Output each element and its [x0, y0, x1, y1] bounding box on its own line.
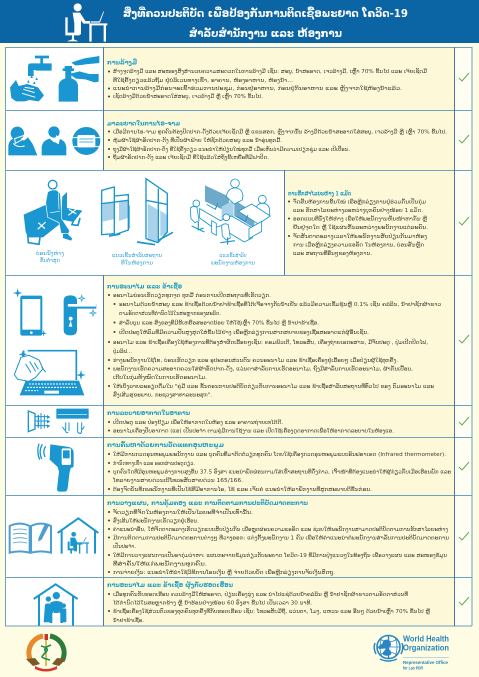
text: physical distancing: ແລະ ຮັກສາໄລຍະຫ່າງລະຫວ່າງບຸກຄົນຢ່າງໜ້ອຍ 1 ແມັດ.	[293, 206, 423, 214]
caption: seating: ຂັ້ນຕ່ຳສຸດ	[40, 257, 61, 264]
text: hand washing: ການລ້າງມື	[107, 58, 138, 66]
text: cleaning and disinfection: ປຸ່ມລິຟ...	[113, 348, 132, 355]
text: ventilation: ການລະບາຍອາກາດໃນອາຄານ	[107, 409, 190, 417]
text: cleaning at home: ນ້ຳຢາຂ້າເຊື້ອ.	[113, 617, 144, 624]
caption: partition	[112, 252, 163, 266]
text: temperature screening	[107, 440, 452, 493]
text: cleaning at home: ການອະນາໄມ ແລະ ຂ້າເຊື້ອ ຜູ້ງກັບຮອດເຮືອນ	[107, 580, 233, 590]
text: cleaning at home: ໄດ້ກຳນົດໄວ້ໃນສະຫຼາກຂ້າງ ຫຼື ນ້ຳຮ້ອນຢ່າງໜ້ອຍ 60 ອົງສາ ຂຶ້ນໄປ ເປັນເວລາ 30 ນາທີ.	[113, 598, 312, 606]
text: ventilation: ເປີດປະຕູ ແລະ ປ່ອງຢ້ຽມ ເພື່ອໃຫ້ອາກາດໃນຫ້ອງ ແລະ ອາຄານຖ່າຍເທໄດ້ດີ.	[113, 418, 283, 426]
tick	[459, 217, 469, 225]
icon: soap dispenser and hands	[59, 56, 99, 102]
caption: seating	[36, 250, 65, 264]
text: cleaning and disinfection: ການອະນາໄມ ແລະ ຂ້າເຊື້ອ	[107, 282, 182, 290]
text: cleaning and disinfection: ພະນັກງານເຮັດຄວາມສະອາດຄວນໃສ່ຜ້າອັດປາກ-ດັງ, ແວ່ນຕາສຳລັບການເຮັດອະນາໄມ, ຖົງມືສຳລັບການເຮັດອະນາໄມ, ຜ້າກັນເປື້ອນ,	[113, 364, 413, 372]
text: temperature screening: ໂທລາຍງານສາຍດ່ວນເບີໂທລະສັບສາຍດ່ວນ 165/166.	[112, 477, 243, 484]
tick	[459, 532, 469, 540]
text: cleaning at home	[107, 580, 431, 624]
text: hand washing: ທີ່ໃຊ້ຄັ້ງດຽວແລ້ວຖິ້ມ ຢູ່ບໍລິເວນທາງເຂົ້າ, ອາຄານ, ຫ້ອງອາຫານ, ຫ້ອງນ້ຳ...	[112, 77, 293, 84]
header banner	[0, 0, 479, 43]
icon: ventilation and air conditioner	[28, 409, 89, 434]
panel: planning and management	[10, 498, 469, 577]
text: respiratory hygiene: ຖິ້ມຜ້າອັດປາກ-ດັງ ແລະ ເຈ້ຍເຊັດມື ທີ່ໃຊ້ແລ້ວໃສ່ຖັງຂີ້ເຫຍື້ອທີ່ມີຝາປິດ.	[112, 153, 269, 161]
text: ventilation	[107, 409, 394, 434]
text: cleaning and disinfection: ໃຫ້ເບິ່ງລາຍລະອຽດຕື່ມໃນ "ຄູ່ມື ແລະ ຂັ້ນຕອນການປະຕິບັດກ່ຽວກັບການອະນາໄມ ແລະ ຂ້າເຊື້ອສຳລັບສະຖານທີ່ທົ່ວໄປ ຂອງ ກົມອະນາໄມ ແລະ	[113, 382, 435, 390]
icon: standalone partitions	[102, 179, 173, 245]
icon: book and pencil	[10, 524, 51, 553]
tick	[459, 335, 469, 343]
text: temperature screening: ໃຫ້ມີການກວດອຸນຫະພູມພະນັກງານ ແລະ ບຸກຄົນທີ່ມາຕິດຕໍ່ວຽກທຸກຄົນ ໂດຍໃຊ້ເຄື່ອງກວດອຸນຫະພູມແບບອິນຟຣາເຣດ (Infrared thermometer).	[113, 451, 446, 458]
icon: phone, door handle and laptop	[13, 288, 96, 395]
tick	[459, 135, 469, 143]
icon: family in house	[34, 584, 78, 626]
panel: hand washing	[10, 56, 469, 102]
text: cleaning and disinfection: ສຳລັບບູນ ແລະ ສິ່ງຂອງທີ່ມີຂີ້ເຫຍື້ອສະອາດນ້ອຍ ໃຫ້ໃຊ້ເຫຼົ້າ 70% ຂຶ້ນໄປ ຫຼື ນ້ຳຢາຂ້າເຊື້ອ.	[119, 318, 319, 326]
text: temperature screening: ການຄົ້ນຫາດ້ວຍການວັດແທກອຸນຫະພູມ	[107, 440, 224, 450]
text: physical distancing: ການຮັກສາໄລຍະຫ່າງ 1 ແມັດ	[288, 188, 351, 198]
tick	[459, 417, 469, 425]
text: hand washing	[107, 58, 427, 100]
text: planning and management: ຈັດວຽກທີ່ຈັດໃນຫ້ອງການໃຫ້ເປັນໄລຍະທີ່ຈຳເປັນເທົ່ານັ້ນ.	[112, 508, 253, 516]
text: respiratory hygiene: ເມື່ອມີການໄອ-ຈາມ ທຸກຄົນຕ້ອງປິດປາກ-ດັງດ້ວຍເຈ້ຍເຊັດມື ຫຼື ແຂນສອກ, ຫຼັງຈາກນັ້ນ ລ້າງມືດ້ວຍນ້ຳສະອາດໃສ່ສະບູ, ເຈວລ້າງມື ຫຼື ເຫຼົ້າ 70% ຂຶ້ນໄປ.	[113, 128, 447, 136]
logo: Ministry of Health	[26, 634, 66, 672]
tick	[459, 73, 469, 81]
text: cleaning and disinfection: ອະນາໄມບ່ອນເຮັດວຽກທຸກຈຸດ ທຸກມື້ ກ່ອນການເປີດສະຖານທີ່ເຮັດວຽກ.	[113, 291, 271, 299]
text: cleaning and disinfection: ອະນາໄມ ແລະ ຂ້າເຊື້ອເຄື່ອງໃຊ້ຫ້ອງການທີ່ຕ້ອງສຳຜັດເລື້ອຍໆເຊັ່ນ: ຄອມພິວເຕີ, ໂທລະສັບ, ເຄື່ອງຖ່າຍເອກະສານ, ມືຈັບປະຕູ , ປຸ່ມເປີດປິດໄຟ,	[113, 338, 428, 346]
logo: World Health Organization	[374, 634, 449, 670]
panel: cleaning and disinfection	[13, 282, 469, 398]
panel: cleaning at home	[34, 580, 469, 626]
text: hand washing: ເຊັດລ້າງມືດ້ວຍນ້ຳສະອາດໃສ່ສະບູ, ເຈວລ້າງມື ຫຼື ເຫຼົ້າ 70% ຂຶ້ນໄປ.	[113, 92, 263, 100]
title: ສິ່ງທີ່ຄວນປະຕິບັດ ເພື່ອປ້ອງກັນການຕິດເຊື້ອພະຍາດ ໂຄວິດ-19	[123, 6, 408, 20]
caption: partition: ແນວເຂັ້ນສຳລັບສະຖານ	[112, 252, 163, 259]
text: ventilation: ອະນາໄມເຄື່ອງປັບອາກາດ (ແອ) ເປັນປະຈຳ ຕາມຄູ່ມືການໃຊ້ງານ ແລະ ເປີດໃຊ້ເຄື່ອງດູດອາກາດເພື່ອໃຫ້ອາກາດລະບາຍໃນຫ້ອງແອ.	[113, 426, 394, 434]
text: cleaning and disinfection: ຕາມອັດຕາສ່ວນທີ່ກຳນົດໄວ້ໃນສະຫຼາກຂອງຜະລິດ.	[119, 309, 221, 317]
text: respiratory hygiene: ມາລະຍາດໃນການໄອ-ຈາມ	[107, 120, 180, 128]
text: physical distancing	[288, 188, 428, 257]
text: physical distancing: ແລະ ສະຖານທີ່ອື່ນໆຂອງຫ້ອງການ.	[293, 250, 372, 257]
text: planning and management: ສົ່ງເສີມໃຫ້ພະນັກງານເຮັດວຽກຢູ່ເຮືອນ.	[113, 517, 199, 524]
text: respiratory hygiene	[107, 120, 447, 161]
panel: temperature screening	[38, 440, 469, 493]
text: cleaning at home: ເມື່ອທຸກຄົນກັບຮອດເຮືອນ ຄວນລ້າງມືໃຫ້ສະອາດ, ປ່ຽນເຄື່ອງນຸ່ງ ແລະ ນຳໄປແຊ່ດ້ວຍນ້ຳຄລໍລິນ ຫຼື ນ້ຳຢາຊັກຜ້າຂາວຕາມອັດຕາສ່ວນທີ່	[113, 590, 408, 598]
text: cleaning and disinfection: ສົ່ງເສີມສຸຂະພາບ, ກະຊວງສາທາລະນະສຸກ".	[113, 391, 212, 398]
text: planning and management: ໃຫ້ມີການວາງແຜນການເປັນອາກຸ່ມວ່າຫາ: ແຜນກະຈາຍຂໍ້ມູນກ່ຽວກັບພະຍາດ ໂຄວິດ-19 ທີ່ມີການປຸ່ງແນວໆໃນທ້ອງຖິ່ນ ເພື່ອວາງແຜນ ແລະ ສະໜອງຂໍ້ມູນ	[113, 551, 447, 559]
logo: World Health Organization: for Lao PDR	[403, 666, 424, 670]
tick	[459, 597, 469, 605]
logo: World Health Organization: Representative Office	[403, 660, 449, 665]
text: temperature screening: ກຳນົດທາງເຂົ້າ ແລະ ອອກຜ່ານປະຕູດຽວ.	[113, 460, 195, 467]
title: ສຳລັບສຳນັກງານ ແລະ ຫ້ອງການ	[189, 27, 342, 40]
caption: desk partition	[211, 252, 256, 266]
text: respiratory hygiene: ຫຸ້ມຜ້າໃຊ້ຜ້າອັດປາກ-ດັງ ທີ່ເປັນຜ້າຝ້າຍ ໃຫ້ຊັກດ້ວຍສະບູ ແລະ ນ້ຳອຸ່ນທຸກມື້.	[113, 136, 282, 144]
text: physical distancing: ຢືນຢູ່ຈຸດໃດ ຫຼື ໃຊ້ແຜ່ນກັ້ນລະຫວ່າງພະນັກງານແຕ່ລະຄົນ.	[293, 224, 428, 231]
icon: person at desk	[65, 3, 107, 42]
text: hand washing: ແນະນຳການລ້າງມືກ່ອນຈະເຂົ້າຮ່ວມການປະຊຸມ, ກ່ອນຢູ່ອາຫານ, ກ່ອນຢູ່ກິນອາຫານ ແລະ ຫຼັງຈາກໃຊ້ຫ້ອງນ້ຳແລ້ວ.	[113, 85, 402, 93]
icon: person working at home	[58, 518, 98, 554]
text: planning and management	[107, 498, 449, 577]
caption: desk partition: ແນວເຂັ້ນສຳລັບ	[220, 252, 246, 259]
text: planning and management: ການຈ່າຍເງິນ: ແນະນຳໃຫ້ນຳໃຊ້ວິທີການໂອນເງິນ ຫຼື ຈ່າຍດ້ວຍບັດ ເພື່ອຫຼີກລ່ຽງການຈັບເງິນສົດຖູ.	[113, 569, 335, 577]
tick	[459, 462, 469, 470]
panel: ventilation	[28, 409, 469, 434]
text: physical distancing: ຈັດສັນຕາຕະລາງເວລາໃຫ້ພະນັກງານສັບປ່ຽນກັນມາຫ້ອງ	[292, 233, 427, 240]
icon: person coughing into elbow	[8, 127, 37, 155]
caption: seating: ບ່ອນນັ່ງຫ່າງ	[36, 250, 65, 257]
icon: open-plan workstations	[190, 179, 270, 245]
text: hand washing: ສ້າງຈຸດລ້າງມື ແລະ ສະໜອງສິ່ງສຳນວຍຄວາມສະດວກໃນການລ້າງມື ເຊັ່ນ: ສະບູ, ນ້ຳສະອາດ, ເຈວລ້າງມື, ເຫຼົ້າ 70% ຂຶ້ນໄປ ແລະ ເຈ້ຍເຊັດມື	[113, 67, 427, 75]
icon: face mask	[72, 127, 101, 155]
icon: faucet and hands	[10, 56, 52, 101]
icon: person covering nose	[42, 126, 66, 155]
text: physical distancing: ການ ເມື່ອຫຼີກລ່ຽງຄວາມແອອັດ ໃນຫ້ອງການ, ບ່ອນສັນຫຼັກ	[293, 241, 424, 248]
text: cleaning at home: ຂ້າເຊື້ອເຄື່ອງໃຊ້ສ່ວນຕົວຂອງທຸກຄົນທຸກຄັ້ງທີ່ກັບຮອດເຮືອນ ເຊັ່ນ: ໂທລະສັບມືຖື, ແວ່ນຕາ, ໂມງ, ແຫວນ ແລະ ອື່ນໆ ດ້ວຍນ້ຳເຫຼົ້າ 70% ຂຶ້ນໄປ ຫຼື	[113, 607, 431, 615]
logo: World Health Organization: World Health	[403, 634, 449, 644]
text: cleaning and disinfection: ອະນາໄມດ້ວຍນ້ຳສະບູ ແລະ ຂ້າເຊື້ອດ້ວຍນ້ຳຢາຂ້າເຊື້ອທີ່ໄດ້ເຈືອຈາງກັບນ້ຳເຢັນ ແລ້ວມີຄວາມເຂັ້ມຂຸ້ນຫຼື 0.1% ເຊັ່ນ ຄລໍລິນ, ນ້ຳຢາຊັກຜ້າຂາວ	[119, 300, 441, 308]
text: physical distancing: ອອກແບບທີ່ນັ່ງໃຫ້ຫ່າງ ເພື່ອໃຫ້ພະນັກງານຫັນໜ້າຫາກັນ ຫຼື	[293, 215, 428, 222]
text: planning and management: ເປັນປະຈຳ.	[113, 542, 136, 550]
logo: World Health Organization: Organization	[403, 642, 449, 652]
text: planning and management: ຄຳແນະນຳອື່ນ, ໃຫ້ຈັດຕາຕະລາງເຮັດວຽກແບບສັບປ່ຽນກັນ ເພື່ອຫຼຸດຜ່ອນຄວາມແອອັດ ແລະ ຊ່ວຍໃຫ້ພະນັກງານສາມາດປະຕິບັດຕາມການຮັກສາໄລຍະຫ່າງ	[113, 525, 448, 533]
text: temperature screening: ບຸກຄົນໃດທີ່ມີອຸນຫະພູມຮ່າງກາຍສູງຂຶ້ນ 37.5 ອົງສາ ແນະນຳພັກຜ່ອນຕາມໃສ່ເຂົ້າສະຖານທີ່ດັ່ງກ່າວ, ເຈົ້າໜ້າທີ່ຕ້ອງແນະນຳໃຫ້ຜູ້ກ່ຽວກັບເມືອເຮືອນພັກ ແລະ	[113, 468, 452, 476]
text: respiratory hygiene: ຖຸງມືຜ້າໃຊ້ຜ້າອັດປາກ-ດັງ ທີ່ໃຊ້ຄັ້ງດຽວ ແນະນຳໃຫ້ປ່ຽນໃໝ່ທຸກມື້ ເມື່ອເຫັນວ່າມີຄວາມເປຽກຊຸ່ມ ແລະ ເປິເປື້ອນ.	[113, 145, 350, 154]
icon: bench with person	[24, 180, 82, 244]
text: temperature screening: ຕ້ອງຈົດບັນທຶກພະນັກງານທີ່ເປັນໄຂ້ທີ່ມີອາການໄອ, ໄຂ້ ແລະ ເຈັບຄໍ ແນະນຳໃຫ້ລາພັກງານທີ່ສຸກສະພາບດີຂຶ້ນກ່ອນ.	[112, 485, 372, 493]
text: cleaning and disinfection: ຮ່າງພະນັກງານໃຊ້ໂທ, ບ່ອນເຮັດວຽກ ແລະ ອຸປະກອນສ່ວນຕົນ ຄວນອະນາໄມ ແລະ ຂ້າເຊື້ອເຄື່ອງຢູ່ເລື້ອຍໆ ເມື່ອປ່ຽນຜູ້ໃຊ້ທຸກຄັ້ງ.	[113, 356, 398, 364]
panel: respiratory hygiene	[8, 120, 469, 161]
caption: partition: ທີ່ໃນຫ້ອງການ	[120, 259, 154, 266]
text: planning and management: ມີການຕິດຕາມການປະຕິບັດມາດຕະການຕ່າງໆ ທີ່ວາງອອກ: ແຕ່ງຕັ້ງພະນັກງານ 1 ຄົນ ເພື່ອໃຫ້ຄຳແນະນຳຕໍ່ພະນັກງານສຳລັບການປະຕິບັດມາດຕະການ	[113, 534, 449, 542]
title	[123, 6, 408, 40]
text: planning and management: ການວາງແຜນ, ການຄຸ້ມຄອງ ແລະ ການຕິດຕາມການປະຕິບັດມາດຕະການ	[107, 498, 308, 508]
caption: desk partition: ພະນັກງານຫ້ອງການ	[211, 259, 256, 266]
panel: physical distancing	[24, 179, 469, 266]
text: planning and management: ທີ່ສຳຄັນໃຫ້ແກ່ພະນັກງານທຸກຄົນ.	[112, 560, 207, 568]
text: cleaning and disinfection: ເກີບໃນກຸ່ມທັງໝົດໃນການເຮັດອະນາໄມ.	[113, 373, 207, 381]
icon: infrared thermometer	[38, 444, 74, 492]
text: physical distancing: ຈັດສັນຫ້ອງການຂຶ້ນໃໝ່ ເພື່ອຫຼີກລ່ຽງການຢູ່ຮ່ວມກັນເປັນກຸ່ມ	[292, 198, 426, 206]
text: cleaning and disinfection: ເປີດປະຕູໃຫ້ລົມທີ່ມີຄວາມປັບສູງສຸດໃສ່ຂຶ້ນໄວ້ຢ່າງ ເພື່ອຫຼີກລ່ຽງການສາກສຍາຍຂອງເຊື້ອສະອາດແກ່ຜູ້ອື່ນເຊັ່ນ.	[119, 328, 369, 336]
text: cleaning and disinfection	[107, 282, 441, 398]
